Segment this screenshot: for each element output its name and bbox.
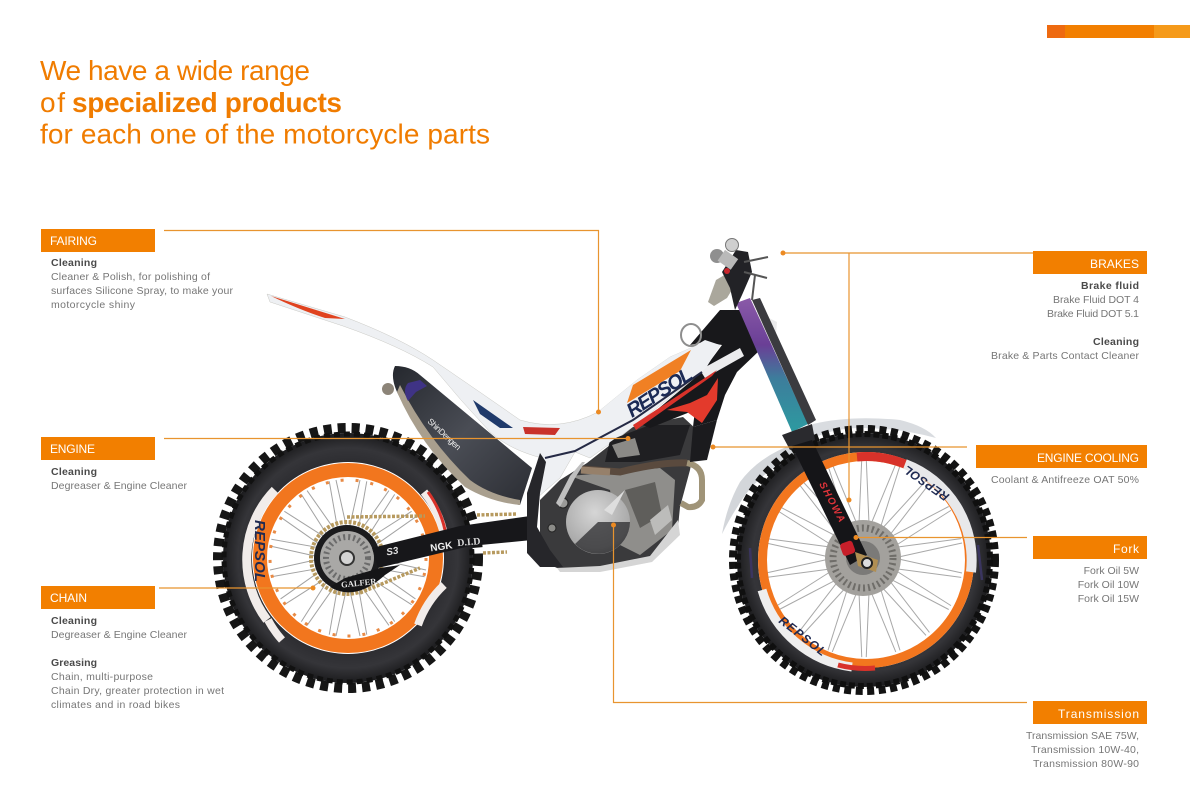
- text: fairing products: Cleaning: [51, 257, 97, 269]
- front wheel: REPSOL: [901, 463, 952, 504]
- text: fairing products: [51, 257, 234, 311]
- panel: transmission: [611, 522, 1147, 770]
- text: engine cooling products: Coolant & Antifreeze OAT 50%: [991, 474, 1139, 486]
- label: transmission: [1033, 701, 1147, 724]
- text: transmission products: [1026, 730, 1139, 770]
- leader line: transmission: [611, 522, 1027, 702]
- main frame: [527, 310, 760, 567]
- text: fairing products: surfaces Silicone Spray, to make your: [51, 285, 234, 297]
- text: chain products: Degreaser & Engine Cleaner: [51, 629, 188, 641]
- text: fairing products: Cleaner & Polish, for polishing of: [51, 271, 210, 283]
- swingarm: NGK: [430, 540, 454, 554]
- panel: engine cooling: [710, 444, 1147, 486]
- rear sprocket and disc: [311, 522, 383, 594]
- front fork: [736, 298, 878, 572]
- text: engine products: Cleaning: [51, 466, 97, 478]
- text: fairing products: motorcycle shiny: [51, 299, 136, 311]
- text: transmission products: Transmission 80W-90: [1033, 758, 1139, 770]
- fuel tank bodywork: [545, 324, 720, 458]
- title: specialized products: [72, 87, 342, 118]
- text: chain products: Chain, multi-purpose: [51, 671, 153, 683]
- leader line: brakes: [780, 250, 1033, 502]
- handlebar controls: [708, 238, 768, 310]
- panel: brakes: [780, 250, 1147, 502]
- text: brakes products: Cleaning: [1093, 336, 1139, 348]
- swingarm: D.I.D: [457, 536, 481, 549]
- text: chain products: Greasing: [51, 657, 97, 669]
- title: [40, 55, 490, 150]
- label: brakes: [1033, 251, 1147, 274]
- text: transmission products: Transmission 10W-40,: [1031, 744, 1139, 756]
- text: chain products: [51, 615, 224, 711]
- label: engine: [41, 437, 155, 460]
- chain guard: [330, 565, 400, 592]
- title: We have a wide range: [40, 55, 310, 86]
- text: fork products: Fork Oil 5W: [1084, 565, 1139, 577]
- text: transmission products: Transmission SAE 75W,: [1026, 730, 1139, 742]
- decorative bar: top right: [1047, 25, 1190, 38]
- motorcycle photo illustration: [218, 238, 995, 691]
- swingarm: [372, 516, 532, 568]
- text: brakes products: Brake fluid: [1081, 280, 1139, 292]
- text: brakes products: [991, 280, 1140, 362]
- label: fairing: [41, 229, 155, 252]
- text: chain products: Chain Dry, greater protection in wet: [51, 685, 224, 697]
- text: chain products: climates and in road bikes: [51, 699, 180, 711]
- chain: [347, 514, 517, 593]
- text: brakes products: Brake & Parts Contact Cleaner: [991, 350, 1140, 362]
- rear wheel: REPSOL: [251, 520, 268, 582]
- label: engine cooling: [976, 445, 1147, 468]
- leader line: engine: [164, 436, 630, 441]
- title: for each one of the motorcycle parts: [40, 118, 490, 150]
- panel: fork: [854, 535, 1147, 605]
- rear wheel: [218, 428, 517, 688]
- fuel tank bodywork: REPSOL: [623, 363, 697, 422]
- exhaust muffler: [382, 366, 532, 505]
- label: chain: CHAIN: [50, 591, 87, 605]
- panel: chain: [41, 586, 316, 711]
- label: transmission: Transmission: [1058, 707, 1139, 721]
- rear fender and seat: [267, 294, 720, 498]
- front brake disc: [825, 520, 901, 596]
- panel: engine: [41, 436, 630, 492]
- engine: [540, 417, 702, 572]
- label: fork: Fork: [1113, 542, 1140, 556]
- text: brakes products: Brake Fluid DOT 4: [1053, 294, 1139, 306]
- label: engine: ENGINE: [50, 442, 95, 456]
- label: engine cooling: ENGINE COOLING: [1037, 451, 1139, 465]
- front fender: [722, 418, 936, 534]
- leader line: fork: [854, 535, 1027, 540]
- title: of: [40, 87, 65, 118]
- text: fork products: [1078, 565, 1139, 605]
- leader line: chain: [159, 586, 316, 590]
- text: engine products: Degreaser & Engine Cleaner: [51, 480, 188, 492]
- front fork: SHOWA: [816, 480, 847, 524]
- text: fork products: Fork Oil 15W: [1078, 593, 1139, 605]
- label: chain: [41, 586, 155, 609]
- swingarm: S3: [385, 545, 400, 558]
- text: fork products: Fork Oil 10W: [1078, 579, 1139, 591]
- chain guard: GALFER: [341, 576, 378, 590]
- leader line: fairing: [164, 230, 601, 414]
- panel: fairing: [41, 229, 601, 414]
- exhaust muffler: ShinDengen: [426, 416, 463, 452]
- text: chain products: Cleaning: [51, 615, 97, 627]
- label: brakes: BRAKES: [1090, 257, 1139, 271]
- label: fork: [1033, 536, 1147, 559]
- leader line: engine cooling: [710, 444, 967, 450]
- text: engine products: [51, 466, 188, 492]
- front wheel: REPSOL: [776, 613, 829, 659]
- front wheel: [733, 429, 995, 691]
- label: fairing: FAIRING: [50, 234, 97, 248]
- text: brakes products: Brake Fluid DOT 5.1: [1047, 308, 1139, 320]
